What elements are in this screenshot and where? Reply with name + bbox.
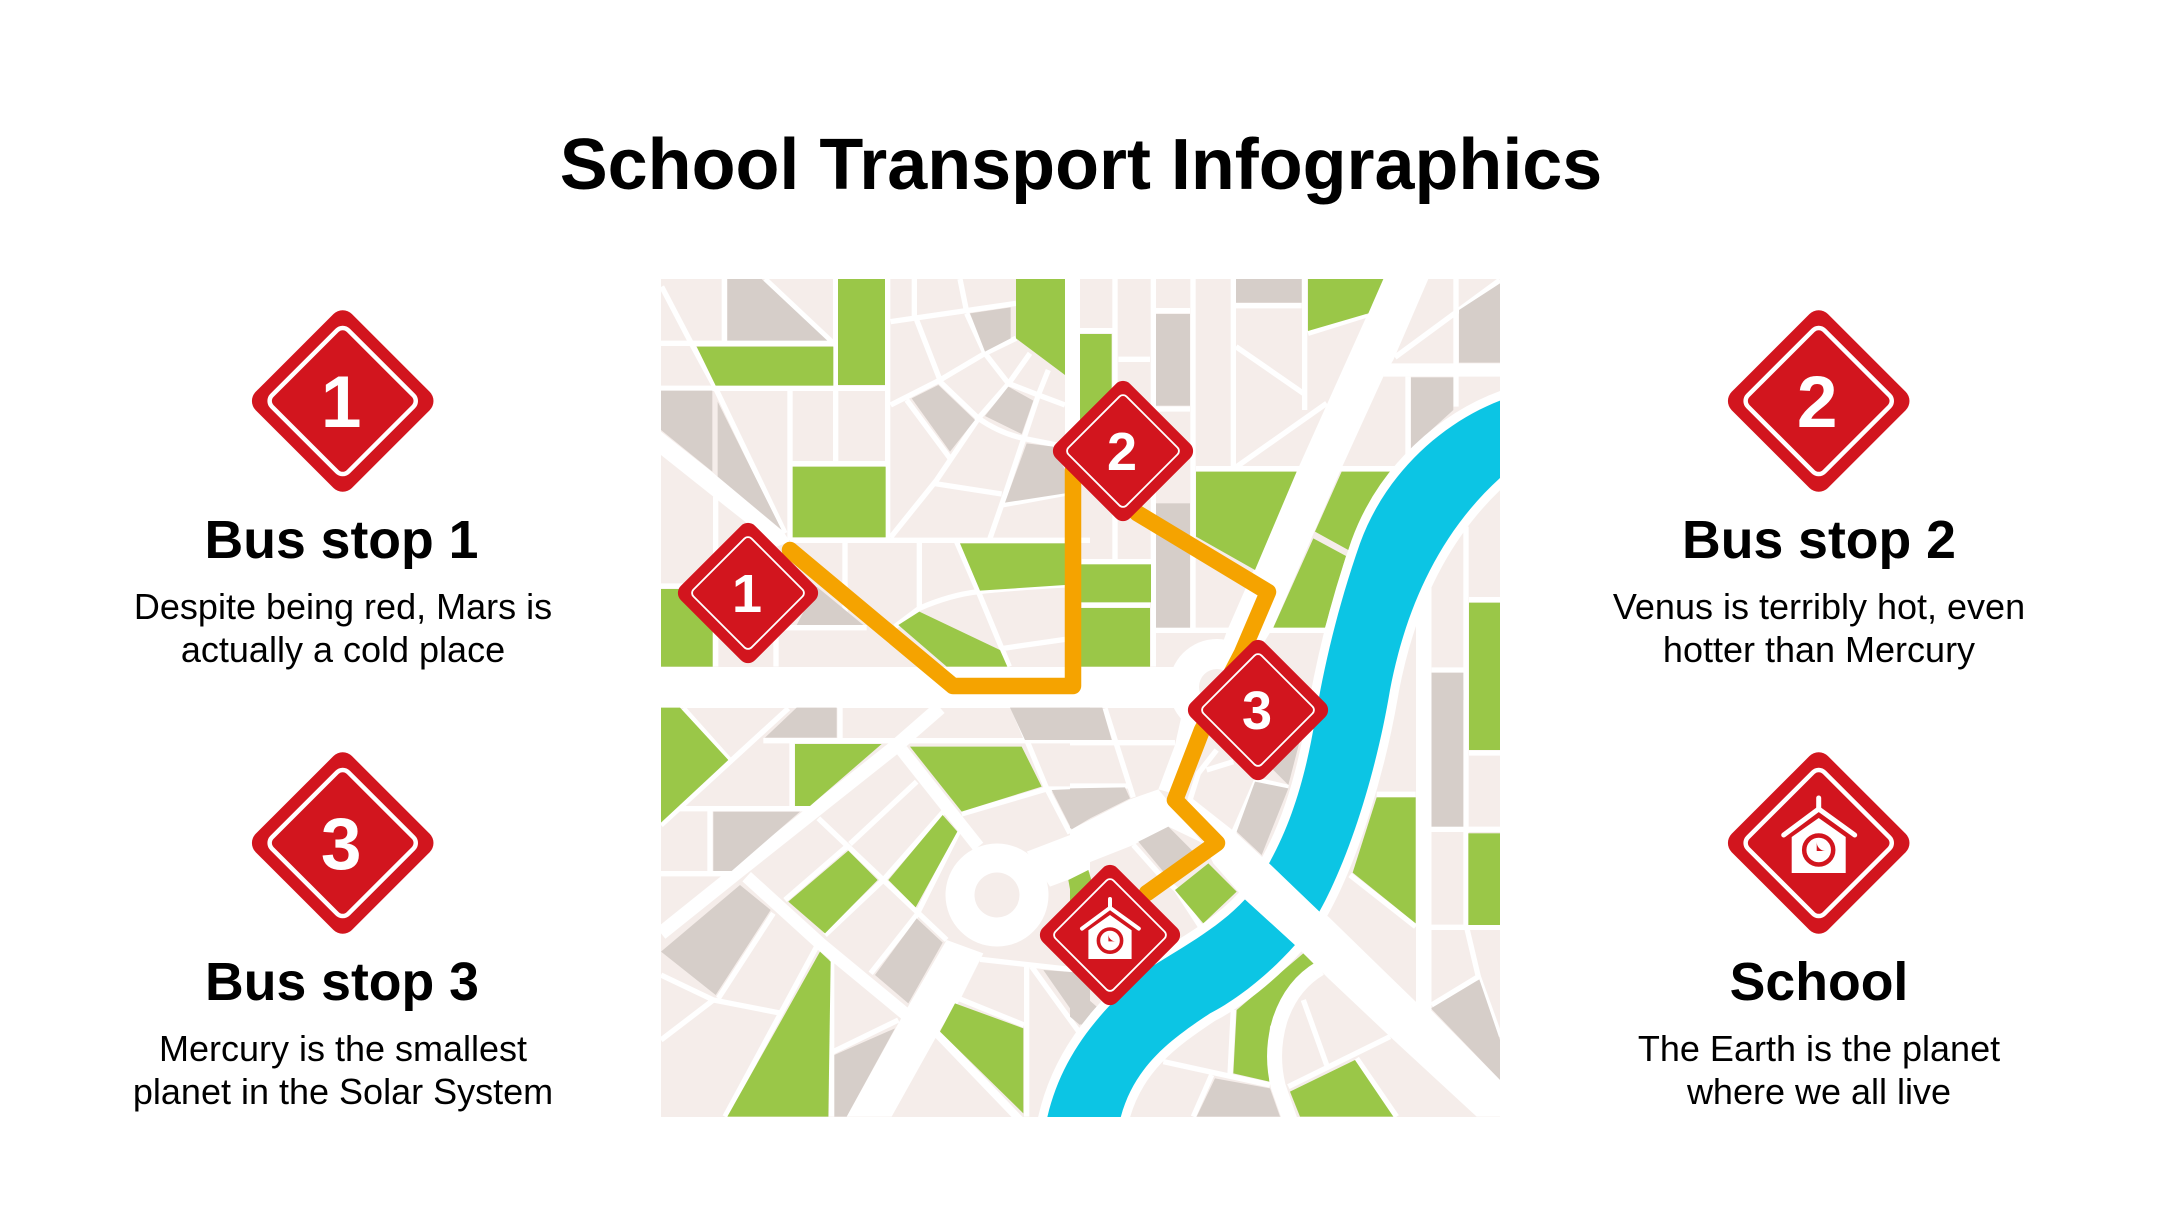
map marker 2: 2 [1107, 422, 1137, 482]
vertical road right of river [1416, 587, 1432, 1010]
parks [661, 279, 1500, 1117]
map marker 1: 1 [732, 564, 762, 624]
map marker 1 [674, 519, 822, 667]
main roads [661, 279, 1500, 1120]
icon: bus stop 2 sign: 2 [1797, 362, 1838, 443]
map marker 3 [1184, 636, 1332, 784]
title: School Transport Infographics [560, 125, 1602, 205]
icon: bus stop 1 sign [247, 305, 439, 497]
map marker 2 [1049, 377, 1197, 525]
icon: bus stop 1 sign: 1 [321, 362, 362, 443]
icon: school sign [1723, 747, 1915, 939]
text: bus stop 1 description: actually a cold place [181, 629, 505, 670]
diagonal road crossing river [1185, 797, 1500, 1117]
roundabouts [946, 639, 1228, 946]
heading: bus stop 3: Bus stop 3 [205, 952, 479, 1012]
heading: school: School [1730, 952, 1908, 1012]
text: bus stop 3 description: planet in the Solar System [133, 1071, 553, 1112]
buildings [661, 279, 1500, 1117]
text: bus stop 1 description: Despite being red, Mars is [134, 586, 552, 627]
panel: bus stop 1 [134, 305, 552, 670]
route line [790, 470, 1073, 686]
text: bus stop 2 description: Venus is terribly hot, even [1613, 586, 2025, 627]
text: bus stop 3 description: Mercury is the smallest [159, 1028, 527, 1069]
heading: bus stop 2: Bus stop 2 [1682, 510, 1956, 570]
map marker school [1036, 861, 1184, 1009]
panel: school [1638, 747, 2000, 1112]
minor streets [661, 279, 1500, 1117]
panel: bus stop 2 [1613, 305, 2025, 670]
icon: bus stop 3 sign: 3 [321, 804, 362, 885]
curved road in lower right [1275, 968, 1320, 1120]
panel: bus stop 3 [133, 747, 553, 1112]
heading: bus stop 1: Bus stop 1 [205, 510, 478, 570]
map marker 3: 3 [1242, 681, 1272, 741]
text: school description: where we all live [1686, 1071, 1951, 1112]
river [1047, 399, 1503, 1120]
panel: map [661, 279, 1503, 1120]
text: bus stop 2 description: hotter than Mercury [1663, 629, 1975, 670]
text: school description: The Earth is the planet [1638, 1028, 2000, 1069]
route line continued [1137, 513, 1268, 893]
icon: bus stop 3 sign [247, 747, 439, 939]
icon: bus stop 2 sign [1723, 305, 1915, 497]
